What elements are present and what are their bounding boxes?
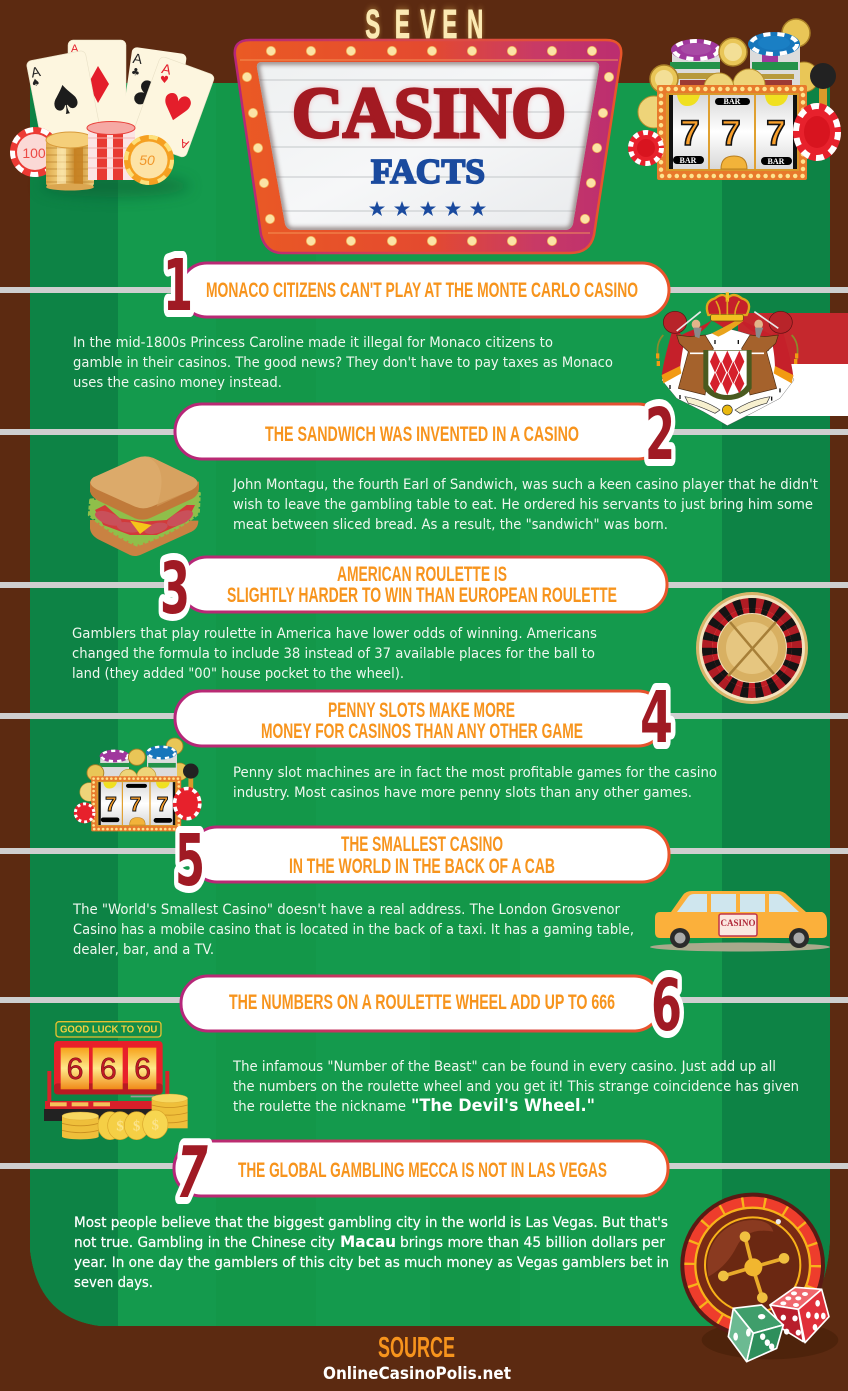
marquee bulbs xyxy=(242,46,614,246)
text block 4 xyxy=(233,765,717,801)
coin stacks: $ xyxy=(116,1118,124,1134)
icon: cards and chips: A xyxy=(30,63,42,81)
text block 7: Macau xyxy=(340,1232,396,1251)
grey lines xyxy=(0,287,848,1169)
text block 7: not true. Gambling in the Chinese city xyxy=(74,1235,335,1251)
heading 3: AMERICAN ROULETTE IS xyxy=(337,563,507,586)
banner 2 xyxy=(175,404,665,459)
banner 6 xyxy=(181,976,661,1031)
icon: cards and chips: ♠ xyxy=(30,77,41,90)
number 1: 1 xyxy=(163,244,193,327)
number 6: 6 xyxy=(651,964,682,1047)
icon: small slot machine: 7 xyxy=(105,793,117,816)
number 4: 4 xyxy=(640,676,673,759)
icon: 666 slot machine: 6 xyxy=(66,1052,84,1086)
icon: small slot machine xyxy=(74,738,202,831)
coin stacks xyxy=(62,1094,188,1140)
text block 3 xyxy=(72,626,597,682)
text block 5 xyxy=(72,902,634,958)
crown xyxy=(707,292,749,321)
text block 1: gamble in their casinos. The good news? They don't have to pay taxes as Monaco xyxy=(73,355,613,371)
icon: slot machine with chips and coins: BAR xyxy=(680,156,697,165)
fact 2 xyxy=(175,393,675,476)
number 5: 5 xyxy=(175,819,205,902)
text block 6: The infamous "Number of the Beast" can be found in every casino. Just add up all xyxy=(232,1059,776,1075)
icon: cards and chips: ♥ xyxy=(160,75,169,86)
chip 100 xyxy=(10,127,60,177)
chip 50: 50 xyxy=(139,152,155,168)
text block 2 xyxy=(232,477,818,533)
good luck sign xyxy=(56,1022,161,1037)
stars xyxy=(369,201,486,216)
chip 50 xyxy=(124,135,174,185)
green die xyxy=(728,1305,783,1362)
coin stacks: $ xyxy=(152,1117,159,1133)
red drapes xyxy=(662,320,793,377)
heading 6: THE NUMBERS ON A ROULETTE WHEEL ADD UP TO 666 xyxy=(229,991,615,1014)
heading 7: THE GLOBAL GAMBLING MECCA IS NOT IN LAS VEGAS xyxy=(238,1159,607,1182)
monks xyxy=(677,335,713,395)
icon: slot machine with chips and coins: BAR xyxy=(768,157,785,166)
text block 3: changed the formula to include 38 instead of 37 available places for the ball to xyxy=(72,646,595,662)
text block 7: Most people believe that the biggest gambling city in the world is Las Vegas. But that's xyxy=(74,1215,668,1231)
title: seven: SEVEN xyxy=(365,2,483,48)
icon: cards and chips xyxy=(10,40,215,197)
heading 4: PENNY SLOTS MAKE MORE xyxy=(328,699,515,722)
heading 4 xyxy=(261,699,583,743)
red puffs xyxy=(663,311,687,333)
icon: small slot machine: 7 xyxy=(130,793,141,816)
icon: casino cab xyxy=(650,891,830,952)
heading 4: MONEY FOR CASINOS THAN ANY OTHER GAME xyxy=(261,720,583,743)
shield xyxy=(703,350,752,400)
text block 6: the roulette the nickname xyxy=(233,1099,406,1115)
heading 1: MONACO CITIZENS CAN'T PLAY AT THE MONTE CARLO CASINO xyxy=(206,279,638,302)
heading 5 xyxy=(289,833,555,878)
text block 4: Penny slot machines are in fact the most profitable games for the casino xyxy=(233,765,717,781)
purple chip stack xyxy=(670,39,722,88)
text block 6 xyxy=(232,1059,799,1116)
red chips xyxy=(628,103,841,166)
text block 4: industry. Most casinos have more penny slots than any other games. xyxy=(233,785,692,801)
blue chip stack xyxy=(748,32,800,86)
text block 6: the numbers on the roulette wheel and you get it! This strange coincidence has given xyxy=(233,1079,799,1095)
title: facts: FACTS xyxy=(371,152,485,191)
good luck sign: GOOD LUCK TO YOU xyxy=(60,1025,157,1036)
text block 7: brings more than 45 billion dollars per xyxy=(400,1235,665,1251)
icon: cards and chips: ♣ xyxy=(130,67,141,79)
text block 3: Gamblers that play roulette in America have lower odds of winning. Americans xyxy=(72,626,597,642)
banner 4 xyxy=(175,691,665,746)
icon: cards and chips: A xyxy=(71,43,79,55)
red die xyxy=(770,1287,829,1343)
lever xyxy=(819,85,827,115)
icon: roulette wheel xyxy=(696,592,808,704)
text block 7: year. In one day the gamblers of this city bet as much money as Vegas gamblers bet in xyxy=(74,1255,669,1271)
heading 5: THE SMALLEST CASINO xyxy=(341,833,503,856)
number 3: 3 xyxy=(160,547,190,630)
icon: 666 slot machine: 6 xyxy=(134,1052,151,1086)
banner 1 xyxy=(180,263,669,317)
heading 3: SLIGHTLY HARDER TO WIN THAN EUROPEAN ROULETTE xyxy=(227,584,617,607)
fact 5 xyxy=(175,819,669,902)
text block 2: wish to leave the gambling table to eat. He ordered his servants to just bring him some xyxy=(233,497,813,513)
icon: cards and chips: ♣ xyxy=(130,73,164,117)
icon: 666 slot machine xyxy=(44,1022,188,1140)
source label: SOURCE xyxy=(378,1332,455,1364)
heading 2: THE SANDWICH WAS INVENTED IN A CASINO xyxy=(265,423,579,446)
banner 7 xyxy=(174,1141,668,1196)
ermine mantle xyxy=(662,328,794,426)
text block 7: seven days. xyxy=(74,1275,153,1291)
number 7: 7 xyxy=(171,1131,213,1214)
text block 6: "The Devil's Wheel." xyxy=(411,1096,595,1116)
icon: cards and chips: ♠ xyxy=(43,75,87,127)
title: casino: CASINO xyxy=(292,73,566,153)
coin stacks: $ xyxy=(133,1118,140,1134)
source url: OnlineCasinoPolis.net xyxy=(323,1364,511,1384)
text block 1 xyxy=(73,335,613,391)
text block 5: Casino has a mobile casino that is located in the back of a taxi. It has a gaming table, xyxy=(73,922,634,938)
heading 3 xyxy=(227,563,617,607)
tassels xyxy=(657,335,798,360)
gold chip stack xyxy=(46,132,94,190)
icon: small slot machine: 7 xyxy=(157,793,168,816)
fact 1 xyxy=(163,244,669,327)
icon: slot machine with chips and coins: BAR xyxy=(724,97,741,106)
motto scroll xyxy=(685,397,770,413)
machine frame xyxy=(657,85,807,180)
text block 2: meat between sliced bread. As a result, the "sandwich" was born. xyxy=(233,517,668,533)
icon: cards and chips: A xyxy=(132,50,144,67)
icon: casino cab: CASINO xyxy=(720,918,756,928)
icon: slot machine with chips and coins: 7 xyxy=(766,114,786,153)
fact 4 xyxy=(175,676,673,759)
icon: wheel and dice xyxy=(680,1193,838,1362)
fact 3 xyxy=(160,547,667,630)
icon: cards and chips: A xyxy=(178,136,190,152)
text block 2: John Montagu, the fourth Earl of Sandwich, was such a keen casino player that he didn't xyxy=(232,477,818,493)
icon: slot machine with chips and coins: 7 xyxy=(721,114,741,153)
fact 6 xyxy=(181,964,682,1047)
icon: slot machine with chips and coins xyxy=(628,19,841,180)
text block 3: land (they added "00" house pocket to the wheel). xyxy=(72,666,404,682)
icon: monaco coat of arms xyxy=(656,292,798,426)
icon: cards and chips: A xyxy=(160,60,173,78)
text block 5: The "World's Smallest Casino" doesn't have a real address. The London Grosvenor xyxy=(72,902,620,918)
text block 1: uses the casino money instead. xyxy=(73,375,282,391)
marquee sign xyxy=(235,40,621,253)
title: casino: CASINO xyxy=(292,73,566,153)
banner 3 xyxy=(180,557,667,612)
icon: slot machine with chips and coins: 7 xyxy=(680,114,700,153)
chip 100: 100 xyxy=(22,145,46,161)
number 2: 2 xyxy=(645,393,675,476)
text block 5: dealer, bar, and a TV. xyxy=(73,942,214,958)
banner 5 xyxy=(190,827,669,882)
heading 5: IN THE WORLD IN THE BACK OF A CAB xyxy=(289,855,555,878)
fact 7 xyxy=(171,1131,668,1214)
icon: cards and chips: ♥ xyxy=(155,85,197,133)
title: seven: SEVEN xyxy=(365,2,483,48)
text block 7 xyxy=(74,1215,669,1291)
swords xyxy=(677,312,778,331)
icon: 666 slot machine: 6 xyxy=(100,1052,117,1086)
icon: monaco flag xyxy=(738,313,848,416)
red chip stack xyxy=(87,122,135,180)
text block 1: In the mid-1800s Princess Caroline made it illegal for Monaco citizens to xyxy=(73,335,553,351)
icon: sandwich xyxy=(89,456,199,556)
